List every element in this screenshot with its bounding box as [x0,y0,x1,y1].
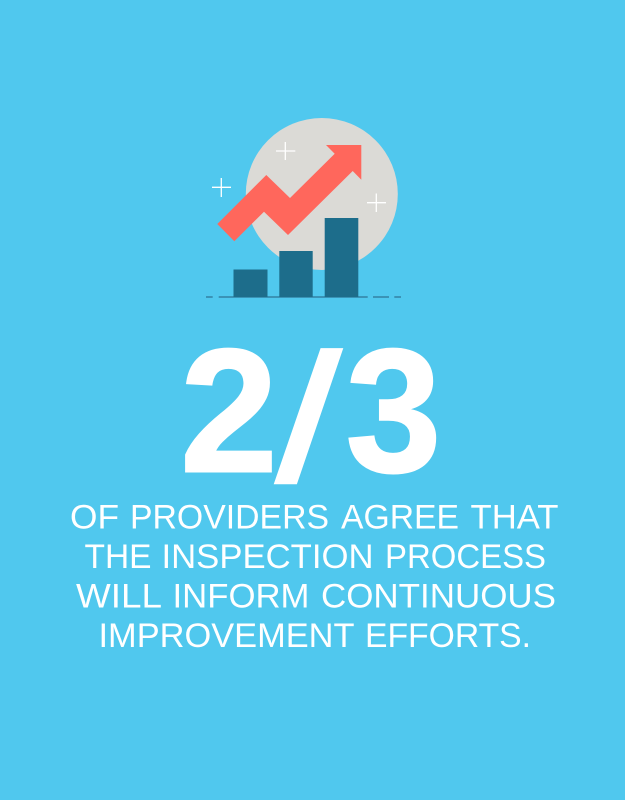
body text: EFFORTS. [365,617,531,655]
body text: INFORM [172,578,310,616]
icon: grey circle [246,118,398,270]
arrow: red trend line [217,145,361,241]
bar chart [234,218,358,297]
body text: OF [70,498,119,536]
body text: AGREE [341,498,459,536]
big number: 2/3 [180,312,441,519]
big number: 2/3: / [277,319,340,519]
big number: 2/3: 3 [346,312,441,509]
big number: 2/3: 2 [180,314,278,510]
icon: baseline dashes [206,296,401,298]
body text: INSPECTION [162,538,374,576]
body text: THE [84,538,152,576]
body text: THAT [470,498,558,536]
body text: PROVIDERS [130,498,329,536]
body text [70,498,558,655]
body text: WILL [76,578,162,616]
icon: rising chart with arrow [206,118,401,298]
icon: sparkles [212,142,386,212]
body text: CONTINUOUS [321,578,556,616]
body text: PROCESS [385,538,546,576]
body text: IMPROVEMENT [98,617,354,655]
